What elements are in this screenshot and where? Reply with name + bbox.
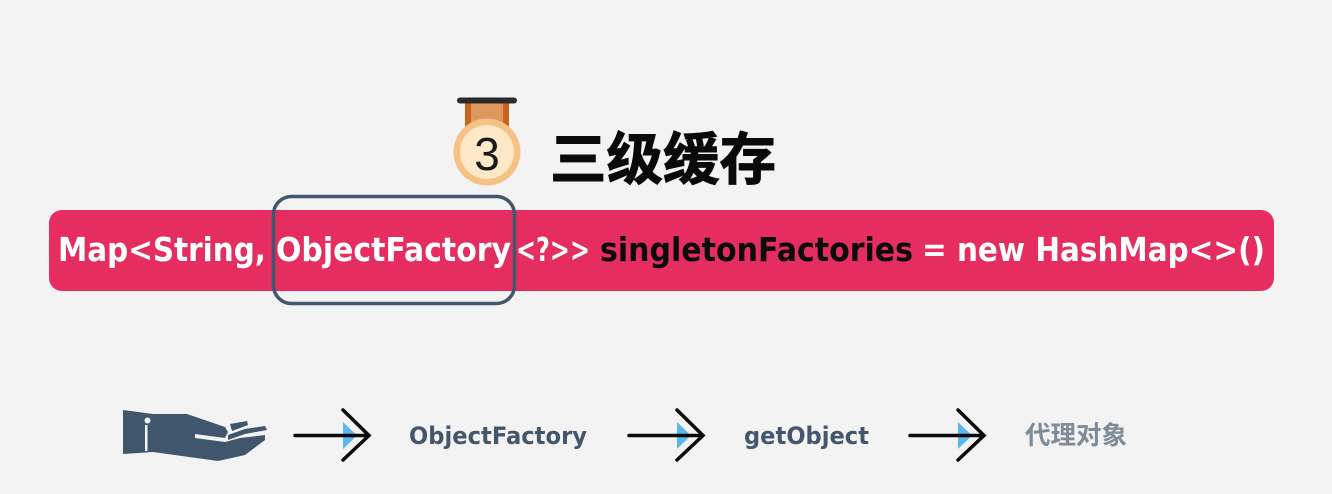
title: 三级缓存 (550, 128, 776, 191)
label: ObjectFactory: ObjectFactory (409, 422, 587, 450)
code text: <?>> (516, 231, 590, 269)
highlight box around ObjectFactory (274, 196, 514, 304)
icon: open hand (123, 410, 267, 461)
arrow 2 (629, 410, 703, 460)
code text: ObjectFactory (276, 231, 511, 269)
arrow 3 (910, 410, 984, 460)
icon: bronze medal number 3: 3 (474, 128, 500, 180)
code text: = new HashMap<>() (922, 231, 1265, 269)
code text: singletonFactories (600, 231, 913, 269)
icon: bronze medal number 3 (454, 98, 520, 186)
label: proxy object: 代理对象 (1025, 422, 1127, 450)
label: getObject: getObject (744, 422, 869, 450)
code text (58, 231, 1265, 269)
code text: Map<String, (58, 231, 266, 269)
code banner (49, 210, 1274, 291)
arrow 1 (295, 410, 369, 460)
